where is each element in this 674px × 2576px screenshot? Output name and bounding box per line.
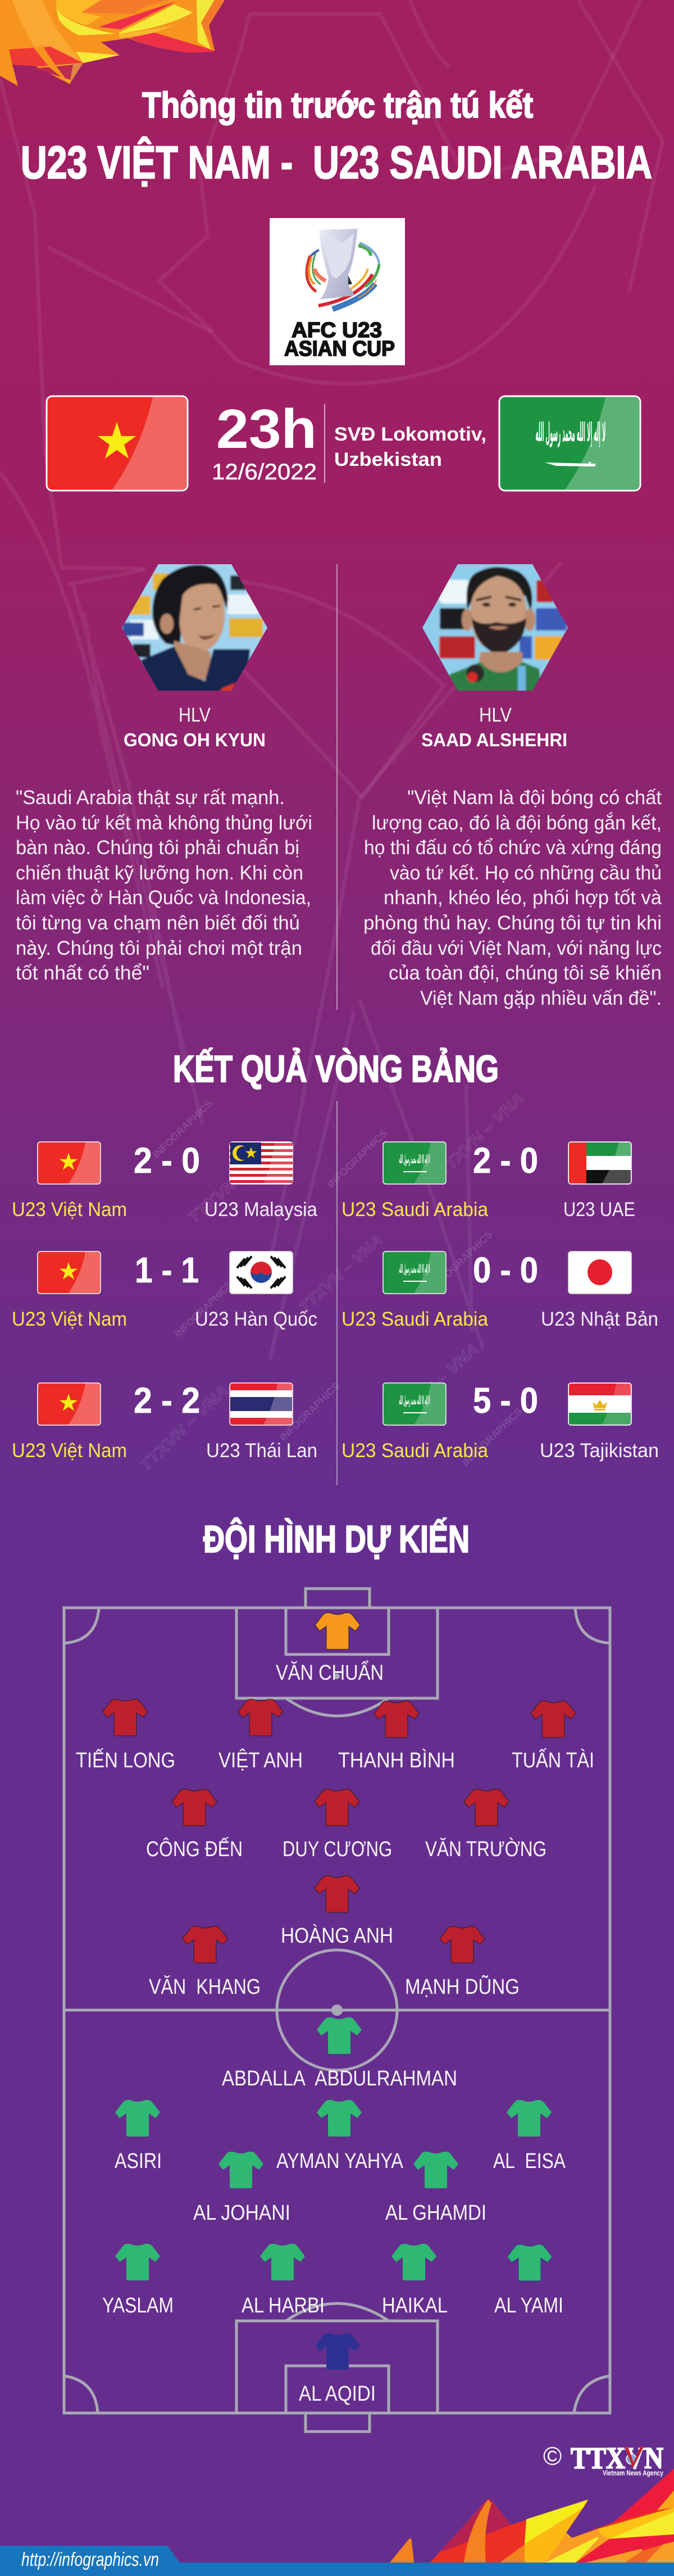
footer bar with URL: [0, 2546, 674, 2576]
coach quote: lượng cao, đó là đội bóng gắn kết,: [372, 812, 662, 834]
player: Al Harbi: AL HARBI: [242, 2294, 325, 2318]
player: Al Yami: AL YAMI: [494, 2294, 563, 2318]
player: Abdalla Abdulrahman: [222, 2017, 457, 2090]
player: Hoàng Anh: HOÀNG ANH: [281, 1924, 393, 1948]
match: Vietnam 2-2 Thailand: [12, 1380, 317, 1462]
match: Saudi Arabia 2-0 UAE: [341, 1140, 635, 1221]
player: Yaslam: YASLAM: [102, 2294, 174, 2318]
player: Văn Khang: [149, 1926, 261, 1999]
player: Asiri: [115, 2100, 162, 2173]
coach quote: của toàn đội, chúng tôi sẽ khiến: [389, 962, 662, 984]
AFC U23 Asian Cup logo: ASIAN CUP: [284, 337, 395, 361]
match: Vietnam 2-0 Malaysia: [12, 1140, 317, 1221]
flag: Vietnam: [38, 1383, 101, 1425]
player: Al Ghamdi: [385, 2152, 486, 2225]
flag: Saudi Arabia: [383, 1251, 446, 1294]
player: Yaslam: [102, 2244, 174, 2318]
flag: Vietnam large: [47, 396, 188, 491]
coach quote: tốt nhất có thể": [16, 962, 149, 984]
match time: [212, 398, 317, 484]
TTXVN logo: ©: [543, 2442, 562, 2470]
match: Saudi Arabia 5-0 Tajikistan: لا إله إلا الله محمد رسول الله: [399, 1394, 430, 1407]
player: Al Yami: [494, 2244, 563, 2318]
match: Saudi Arabia 0-0 Japan: [341, 1250, 658, 1330]
player: Việt Anh: [218, 1699, 303, 1772]
flag: Saudi Arabia large: [499, 396, 640, 491]
coach quote: phòng thủ hay. Chúng tôi tự tin khi: [363, 912, 662, 934]
stadium: SVĐ Lokomotiv,: [334, 424, 486, 445]
coach quote: [363, 787, 662, 1009]
watermarks: INFOGRAPHICS: [430, 1228, 494, 1291]
match: Saudi Arabia 2-0 UAE: U23 UAE: [563, 1199, 635, 1221]
player: Ayman Yahya: AYMAN YAHYA: [276, 2149, 404, 2173]
flag: UAE: [568, 1142, 631, 1184]
coach quote: Họ vào tứ kết mà không thủng lưới: [16, 812, 312, 834]
match: Saudi Arabia 5-0 Tajikistan: U23 Tajikistan: [540, 1440, 659, 1462]
player: Al Aqidi: [299, 2333, 376, 2406]
TTXVN logo: [543, 2441, 664, 2477]
coach photo: Saad Alshehri: [418, 562, 570, 694]
footer bar with URL: http://infographics.vn: [21, 2549, 159, 2570]
title line 1: Thông tin trước trận tú kết: [142, 85, 533, 125]
coach quote: chiến thuật kỹ lưỡng hơn. Khi còn: [16, 862, 303, 884]
watermarks: [136, 1090, 527, 1474]
coach quote: bàn nào. Chúng tôi phải chuẩn bị: [16, 837, 299, 859]
team names: U23 Saudi Arabia: [341, 1440, 489, 1462]
flag: Vietnam: [38, 1251, 101, 1294]
match: Saudi Arabia 5-0 Tajikistan: [341, 1380, 659, 1462]
coach quote: tôi từng va chạm nên biết đối thủ: [16, 912, 300, 934]
match: Saudi Arabia 0-0 Japan: لا إله إلا الله محمد رسول الله: [399, 1262, 430, 1276]
AFC U23 Asian Cup logo: [270, 218, 405, 365]
player: Ayman Yahya: [276, 2100, 404, 2173]
player: Al Harbi: [242, 2244, 325, 2318]
logo wordmark: AFC U23: [292, 319, 382, 342]
player: Văn Trường: VĂN TRƯỜNG: [425, 1837, 547, 1861]
coach name: GONG OH KYUN: [124, 729, 266, 750]
team names: U23 Saudi Arabia: [341, 1308, 489, 1330]
score: 2 - 0: [134, 1140, 200, 1181]
stadium: [334, 424, 486, 470]
flag: Saudi Arabia: [383, 1383, 446, 1425]
player: Asiri: ASIRI: [115, 2149, 162, 2173]
watermarks: TTXVN – VNA: [296, 1231, 385, 1316]
player: Văn Chuẩn: VĂN CHUẨN: [276, 1659, 384, 1685]
watermarks: TTXVN – VNA: [136, 1382, 231, 1474]
player: Văn Trường: [425, 1789, 547, 1861]
score: 2 - 2: [134, 1380, 200, 1421]
watermarks: INFOGRAPHICS: [325, 1127, 389, 1190]
match: Vietnam 2-2 Thailand: U23 Thái Lan: [206, 1440, 317, 1462]
coach title: HLV: [479, 704, 512, 726]
coach quote: này. Chúng tôi phải chơi một trận: [16, 937, 302, 959]
watermarks: INFOGRAPHICS: [277, 1380, 341, 1443]
heading: group stage results: KẾT QUẢ VÒNG BẢNG: [173, 1048, 499, 1090]
player: Al Eisa: AL EISA: [493, 2149, 566, 2173]
player: Thanh Bình: THANH BÌNH: [338, 1748, 455, 1772]
score: 2 - 0: [473, 1140, 538, 1181]
match: Saudi Arabia 0-0 Japan: U23 Nhật Bản: [541, 1308, 658, 1330]
player: Haikal: HAIKAL: [382, 2294, 448, 2318]
team names: U23 Việt Nam: [12, 1199, 127, 1221]
watermarks: TTXVN – VNA: [434, 1090, 527, 1180]
coach quote: "Việt Nam là đội bóng có chất: [407, 787, 662, 809]
coach title: HLV: [179, 704, 211, 726]
coach name: SAAD ALSHEHRI: [421, 729, 567, 750]
player: Tuấn Tài: TUẤN TÀI: [512, 1748, 594, 1772]
player: Văn Chuẩn: [276, 1613, 384, 1685]
player: Thanh Bình: [338, 1701, 455, 1772]
kick-off hour: 23h: [216, 398, 317, 460]
TTXVN logo: TTXVN: [571, 2441, 663, 2475]
player: Al Aqidi: AL AQIDI: [299, 2382, 376, 2406]
player: Haikal: [382, 2244, 448, 2318]
score: 1 - 1: [135, 1250, 199, 1290]
match: Vietnam 1-1 South Korea: [12, 1250, 317, 1330]
lineup: Saudi Arabia: [102, 2017, 566, 2406]
heading: predicted lineups: ĐỘI HÌNH DỰ KIẾN: [203, 1517, 470, 1561]
player: Al Ghamdi: AL GHAMDI: [385, 2201, 486, 2225]
player: Al Johani: AL JOHANI: [193, 2201, 290, 2225]
team names: U23 Saudi Arabia: [341, 1199, 489, 1221]
coach photo: Gong Oh Kyun: [118, 562, 270, 694]
match: Saudi Arabia 2-0 UAE: لا إله إلا الله محمد رسول الله: [399, 1153, 430, 1166]
player: Tuấn Tài: [512, 1701, 594, 1772]
coach quote: vào tứ kết. Họ có những cầu thủ: [390, 862, 662, 884]
player: Công Đến: [146, 1789, 243, 1861]
panel: coach Saudi Arabia: [363, 562, 662, 1009]
player: Mạnh Dũng: [405, 1926, 520, 1999]
watermarks: INFOGRAPHICS: [460, 1405, 524, 1468]
watermarks: INFOGRAPHICS: [172, 1279, 235, 1340]
team names: U23 Việt Nam: [12, 1440, 127, 1462]
background trophy outline pattern: [0, 0, 663, 1360]
player: Công Đến: CÔNG ĐẾN: [146, 1836, 243, 1861]
player: Abdalla Abdulrahman: ABDALLA ABDULRAHMAN: [222, 2067, 457, 2090]
title: [21, 85, 652, 188]
coach quote: [16, 787, 312, 984]
stadium: Uzbekistan: [334, 449, 442, 470]
player: Al Johani: [193, 2152, 290, 2225]
match: Vietnam 1-1 South Korea: U23 Hàn Quốc: [195, 1308, 317, 1330]
coach quote: nhanh, khéo léo, phối hợp tốt và: [384, 887, 662, 909]
flag: Tajikistan: [568, 1383, 631, 1425]
match date: 12/6/2022: [212, 460, 317, 484]
flag: Japan: [568, 1251, 631, 1294]
player: Duy Cương: [283, 1789, 392, 1861]
player: Tiến Long: [76, 1699, 175, 1772]
flag: Thailand: [230, 1383, 293, 1425]
player: Việt Anh: VIỆT ANH: [218, 1748, 303, 1772]
coach quote: làm việc ở Hàn Quốc và Indonesia,: [16, 887, 311, 909]
football pitch: [64, 1589, 610, 2432]
coach quote: họ thi đấu có tổ chức và xứng đáng: [364, 837, 662, 859]
player: Văn Khang: VĂN KHANG: [149, 1975, 261, 1999]
player: Al Eisa: [493, 2100, 566, 2173]
score: 5 - 0: [473, 1380, 538, 1421]
score: 0 - 0: [473, 1250, 538, 1290]
coach quote: đối đầu với Việt Nam, với năng lực: [371, 937, 662, 959]
flag: Saudi Arabia: [383, 1142, 446, 1184]
team names: U23 Việt Nam: [12, 1308, 127, 1330]
player: Mạnh Dũng: MẠNH DŨNG: [405, 1974, 520, 1999]
flag: Vietnam: [38, 1142, 101, 1184]
watermarks: TTXVN – VNA: [185, 1138, 283, 1227]
watermarks: TTXVN – VNA: [386, 1340, 482, 1431]
lineup: Vietnam: [76, 1613, 594, 1999]
flag: Malaysia: [230, 1142, 293, 1184]
coach quote: "Saudi Arabia thật sự rất mạnh.: [16, 787, 285, 809]
match: Vietnam 2-0 Malaysia: U23 Malaysia: [204, 1199, 317, 1221]
player: Duy Cương: DUY CƯƠNG: [283, 1838, 392, 1861]
coach quote: Việt Nam gặp nhiều vấn đề".: [420, 987, 662, 1009]
player: Hoàng Anh: [281, 1876, 393, 1948]
panel: coach Vietnam: [16, 562, 312, 984]
flame decoration: bottom right: [390, 2469, 674, 2563]
flag: South Korea: [230, 1251, 293, 1294]
player: Tiến Long: TIẾN LONG: [76, 1748, 175, 1772]
flame decoration: top left: [0, 0, 225, 86]
watermarks: INFOGRAPHICS: [151, 1097, 215, 1160]
